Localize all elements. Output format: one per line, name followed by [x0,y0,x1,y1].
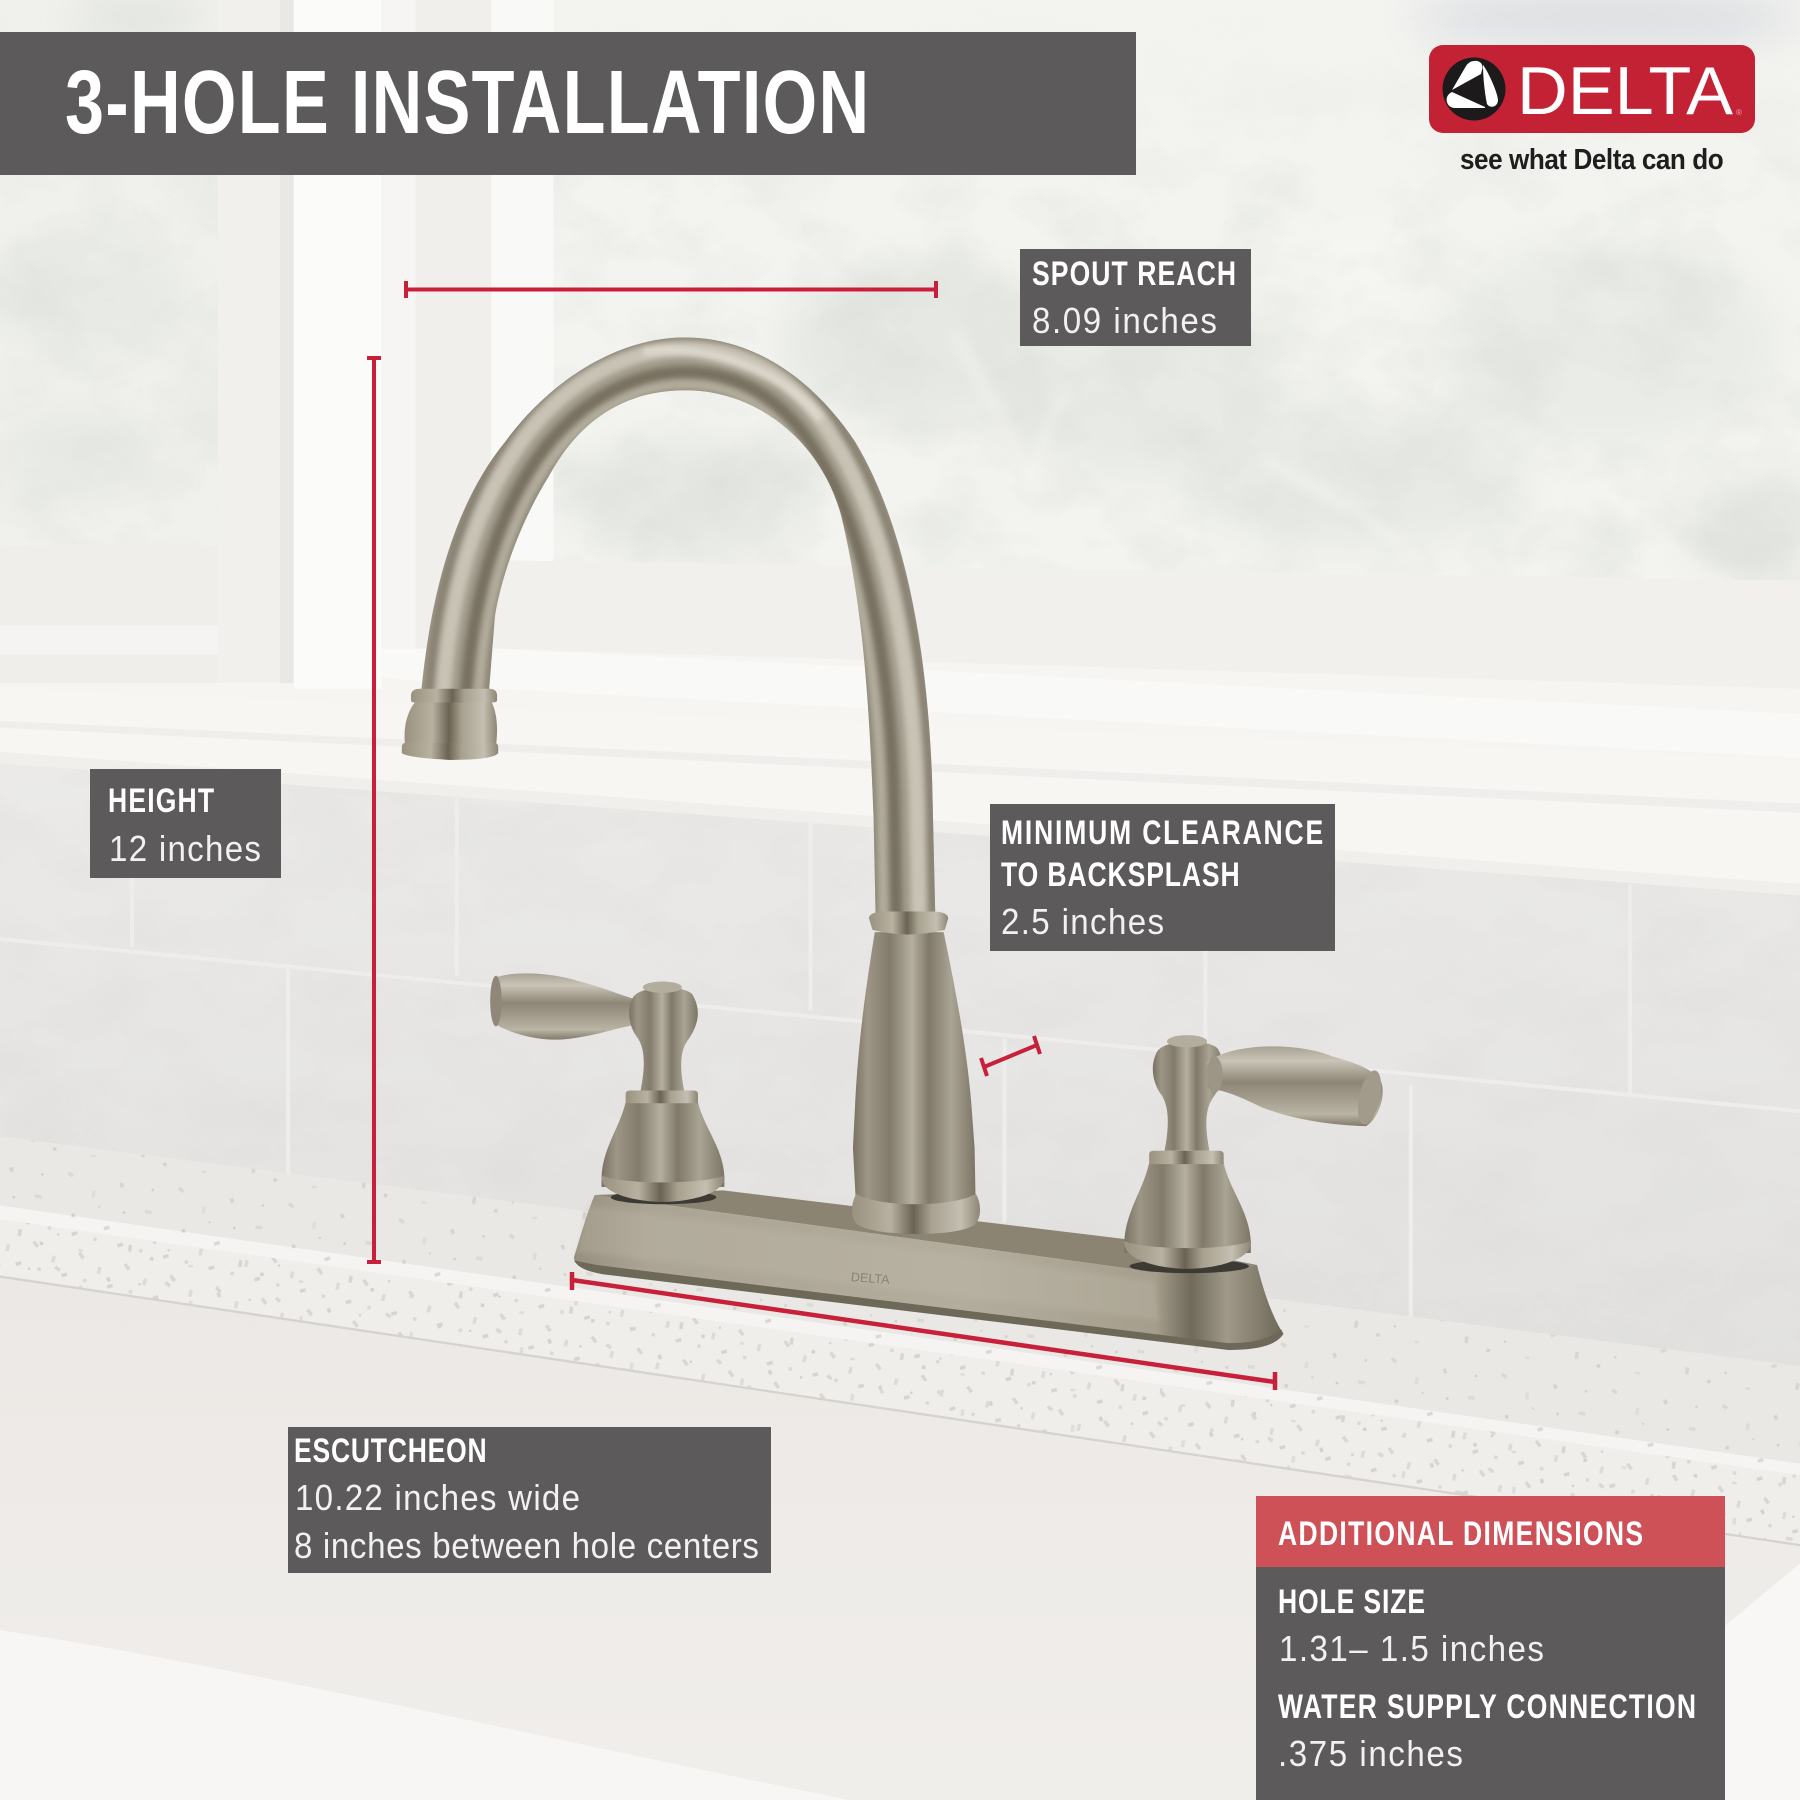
spout tube [422,338,936,912]
faucet base plate [574,1190,1283,1350]
water supply heading: WATER SUPPLY CONNECTION [1278,1688,1696,1726]
clearance heading: TO BACKSPLASH [1001,856,1240,894]
window frame [0,0,1800,758]
window pane left with blurred trees [0,0,218,545]
clearance heading: MINIMUM CLEARANCE [1001,814,1323,852]
escutcheon values [294,1479,759,1566]
additional dimensions body [1256,1567,1725,1800]
panel: spout reach [1020,249,1251,346]
additional dimensions header [1256,1496,1725,1567]
tile backsplash [0,763,1800,1383]
dimension line: spout reach [406,281,936,298]
escutcheon values: 8 inches between hole centers [294,1527,759,1566]
left foliage mottling [198,418,208,428]
additional dimensions heading: ADDITIONAL DIMENSIONS [1278,1515,1643,1553]
height heading: HEIGHT [108,782,214,820]
logo wordmark: DELTA [1517,53,1734,129]
title text: 3-HOLE INSTALLATION [65,53,869,153]
spout reach heading: SPOUT REACH [1032,255,1236,293]
logo registered mark: ® [1736,108,1742,117]
panel: height [90,769,281,878]
panel: escutcheon [288,1427,771,1573]
hole size value: 1.31– 1.5 inches [1279,1630,1544,1669]
clearance value: 2.5 inches [1001,903,1164,942]
dimension line: clearance [981,1036,1040,1076]
spout reach value: 8.09 inches [1032,302,1217,341]
engraved plate logo: DELTA [850,1270,891,1287]
title banner [0,32,1136,175]
right handle [1124,1035,1385,1273]
panel: minimum clearance [990,804,1335,951]
panel: additional dimensions [1256,1496,1725,1800]
left handle [490,973,724,1204]
faucet column [852,911,980,1234]
window pane right with blurred trees [553,0,1800,585]
escutcheon values: 10.22 inches wide [295,1479,580,1518]
clearance heading [1001,814,1323,894]
faucet [390,321,1385,1350]
logo emblem [1442,58,1506,120]
window sill [0,689,1800,895]
dimension line: escutcheon [572,1272,1275,1390]
countertop [0,1136,1800,1545]
spout aerator [402,689,498,760]
Delta logo [1429,45,1755,175]
height value: 12 inches [109,830,261,869]
tree branches [953,333,1423,563]
tree foliage mottling [562,181,1684,578]
logo tagline: see what Delta can do [1460,143,1724,175]
dimension line: height [367,358,381,1262]
logo red badge [1429,45,1755,133]
escutcheon heading: ESCUTCHEON [294,1432,487,1470]
water supply value: .375 inches [1278,1735,1463,1774]
sink basin [0,1268,1800,1800]
hole size heading: HOLE SIZE [1278,1583,1425,1621]
